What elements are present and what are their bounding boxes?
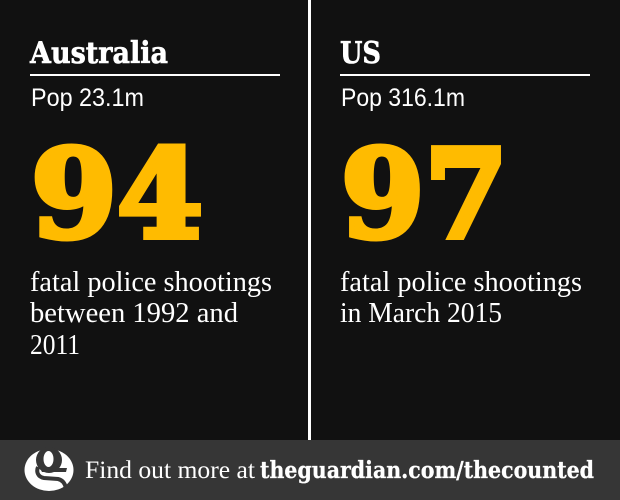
footer text: Find out more at xyxy=(85,457,255,484)
big number: 97: 97 xyxy=(341,122,508,266)
icon: Guardian logo xyxy=(24,447,74,491)
panel: US xyxy=(340,36,590,329)
description: Australia: fatal police shootings xyxy=(30,267,272,298)
description: Australia: between 1992 and xyxy=(30,298,238,329)
description: US: fatal police shootings xyxy=(340,267,582,298)
population: US: Pop 316.1m xyxy=(341,84,465,112)
heading: Australia: Australia xyxy=(29,36,168,71)
footer bar xyxy=(0,440,620,500)
big number: 94: 94 xyxy=(31,122,203,266)
description: Australia: 2011 xyxy=(30,330,80,361)
population: Australia: Pop 23.1m xyxy=(31,84,144,112)
panel: Australia xyxy=(29,36,280,361)
description: US xyxy=(340,267,582,329)
heading: US: US xyxy=(340,36,381,71)
description: US: in March 2015 xyxy=(340,298,502,329)
description: Australia xyxy=(30,267,272,361)
